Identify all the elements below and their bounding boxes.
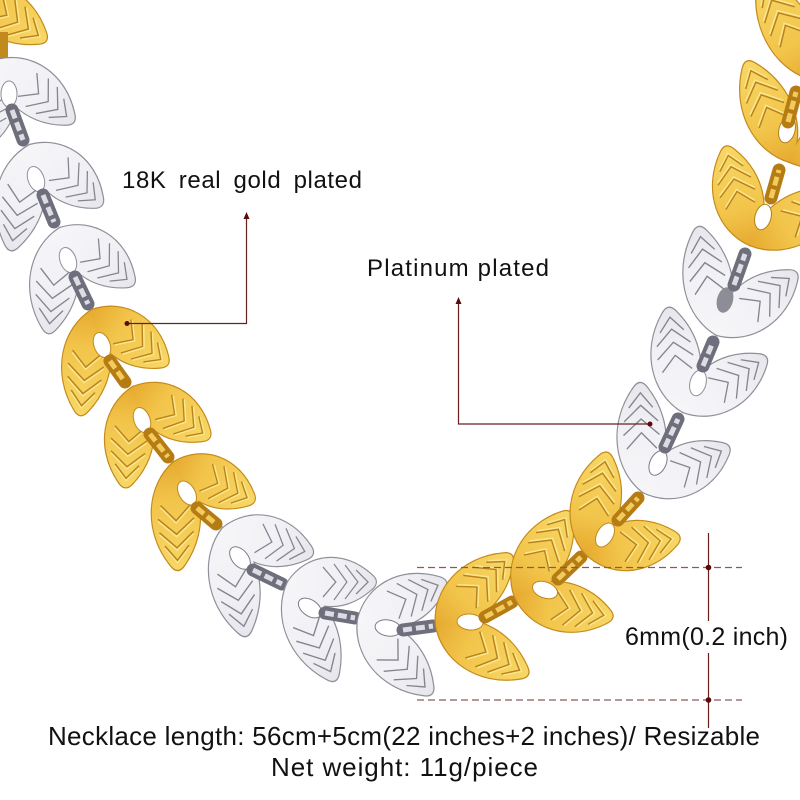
gold leaf pair 0 [0, 0, 59, 61]
silver leaf pair 1 [0, 41, 89, 149]
gold leaf pair 10 [420, 538, 539, 696]
silver leaf pair 2 [0, 127, 117, 254]
silver leaf pair 14 [645, 305, 779, 432]
callout line: 18K gold [124, 212, 250, 326]
gold leaf pair 16 [703, 141, 800, 266]
silver leaf pair 9 [341, 560, 455, 711]
gold leaf pair 4 [57, 291, 182, 418]
gold leaf pair 6 [150, 440, 265, 571]
label: size: 6mm(0.2 inch) [625, 623, 788, 651]
gold leaf pair 12 [561, 448, 683, 577]
gold leaf pair 17 [725, 52, 800, 183]
dimension lines: 6mm [417, 533, 742, 728]
silver leaf pair 8 [266, 558, 376, 691]
silver leaf pair 15 [675, 223, 800, 354]
silver leaf pair 3 [25, 209, 148, 336]
label: Platinum plated: Platinum plated [367, 255, 549, 282]
silver leaf pair 7 [199, 505, 319, 641]
label: 18K real gold plated: 18K real gold plated [122, 167, 362, 194]
gold leaf pair 5 [101, 367, 223, 489]
silver leaf pair 13 [616, 382, 740, 513]
gold leaf pair 18 [739, 0, 800, 92]
callout line: platinum [456, 297, 652, 426]
gold leaf pair 11 [495, 499, 617, 641]
caption: net weight: Net weight: 11g/piece [271, 752, 538, 782]
caption: necklace length: Necklace length: 56cm+5cm(22 inches+2 inches)/ Resizable [48, 721, 760, 751]
